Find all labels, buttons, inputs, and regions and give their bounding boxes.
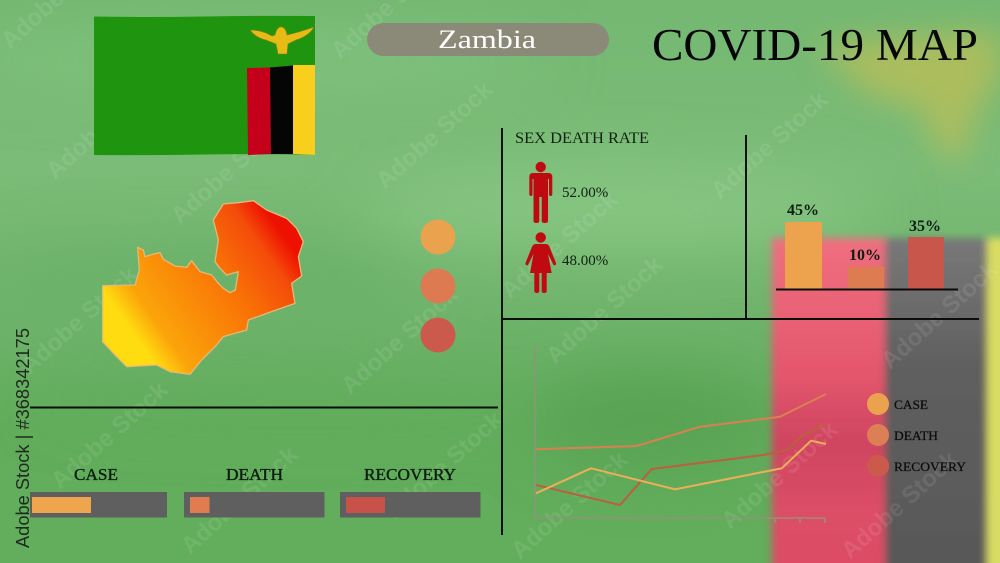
bar: recovery (908, 218, 944, 289)
flag eagle (250, 27, 314, 54)
watermark: Adobe Stock repeated: Adobe Stock (336, 281, 464, 399)
watermark: Adobe Stock repeated: Adobe Stock (876, 256, 1000, 374)
watermark id: vertical Adobe Stock label: Adobe Stock | #368342175 (13, 328, 33, 548)
progress: death: DEATH (226, 465, 283, 484)
legend: recovery: RECOVERY (894, 460, 966, 474)
heading: SEX DEATH RATE (515, 130, 649, 147)
watermark: Adobe Stock repeated: Adobe Stock (706, 86, 834, 204)
progress bars (30, 465, 480, 518)
bar: case: 45% (787, 202, 819, 219)
bar: case (785, 202, 822, 289)
panel: sex death rate (515, 130, 649, 293)
axes (535, 345, 825, 523)
value: female: 48.00% (562, 253, 608, 269)
flag stripe: yellow (293, 65, 315, 155)
bar: death: 10% (849, 247, 881, 264)
line: death (536, 394, 826, 449)
panel: percentage bar chart (776, 202, 958, 290)
flag stripe: red (247, 68, 271, 155)
country name pill (367, 23, 609, 56)
country name pill: Zambia (438, 25, 537, 54)
line chart (535, 345, 826, 523)
watermark: Adobe Stock repeated: Adobe Stock (16, 261, 144, 379)
icon: female figure (525, 232, 556, 293)
watermark: Adobe Stock repeated: Adobe Stock (371, 76, 499, 194)
chart legend (867, 393, 966, 477)
indicator dots (420, 220, 456, 352)
legend: death: DEATH (894, 429, 938, 443)
panel frame lines (30, 128, 979, 535)
title: COVID-19 MAP (652, 20, 978, 70)
watermark: Adobe Stock repeated: Adobe Stock (46, 376, 174, 494)
watermark: Adobe Stock repeated: Adobe Stock (176, 441, 304, 559)
progress: case: CASE (74, 465, 118, 484)
bar: recovery: 35% (909, 218, 941, 235)
progress: death (184, 465, 324, 518)
flag stripe: black (270, 66, 293, 154)
watermark: Adobe Stock repeated: Adobe Stock (836, 446, 964, 563)
watermark: Adobe Stock repeated: Adobe Stock (381, 406, 509, 524)
value: male: 52.00% (562, 185, 608, 201)
watermark: Adobe Stock repeated: Adobe Stock (41, 66, 169, 184)
line: case (536, 441, 826, 493)
progress: recovery: RECOVERY (364, 465, 456, 484)
map of Zambia (103, 201, 303, 374)
progress: recovery (340, 465, 480, 518)
watermark: Adobe Stock repeated: Adobe Stock (541, 251, 669, 369)
line: recovery (536, 425, 826, 505)
legend: case: CASE (894, 398, 928, 412)
watermark: Adobe Stock repeated: Adobe Stock (496, 186, 624, 304)
icon: male figure (529, 162, 552, 223)
watermark: Adobe Stock repeated: Adobe Stock (506, 446, 634, 563)
progress: case (30, 465, 167, 518)
bar: death (848, 247, 884, 289)
flag of Zambia (94, 16, 315, 155)
watermark: Adobe Stock repeated: Adobe Stock (716, 416, 844, 534)
watermark: Adobe Stock repeated: Adobe Stock (166, 111, 294, 229)
